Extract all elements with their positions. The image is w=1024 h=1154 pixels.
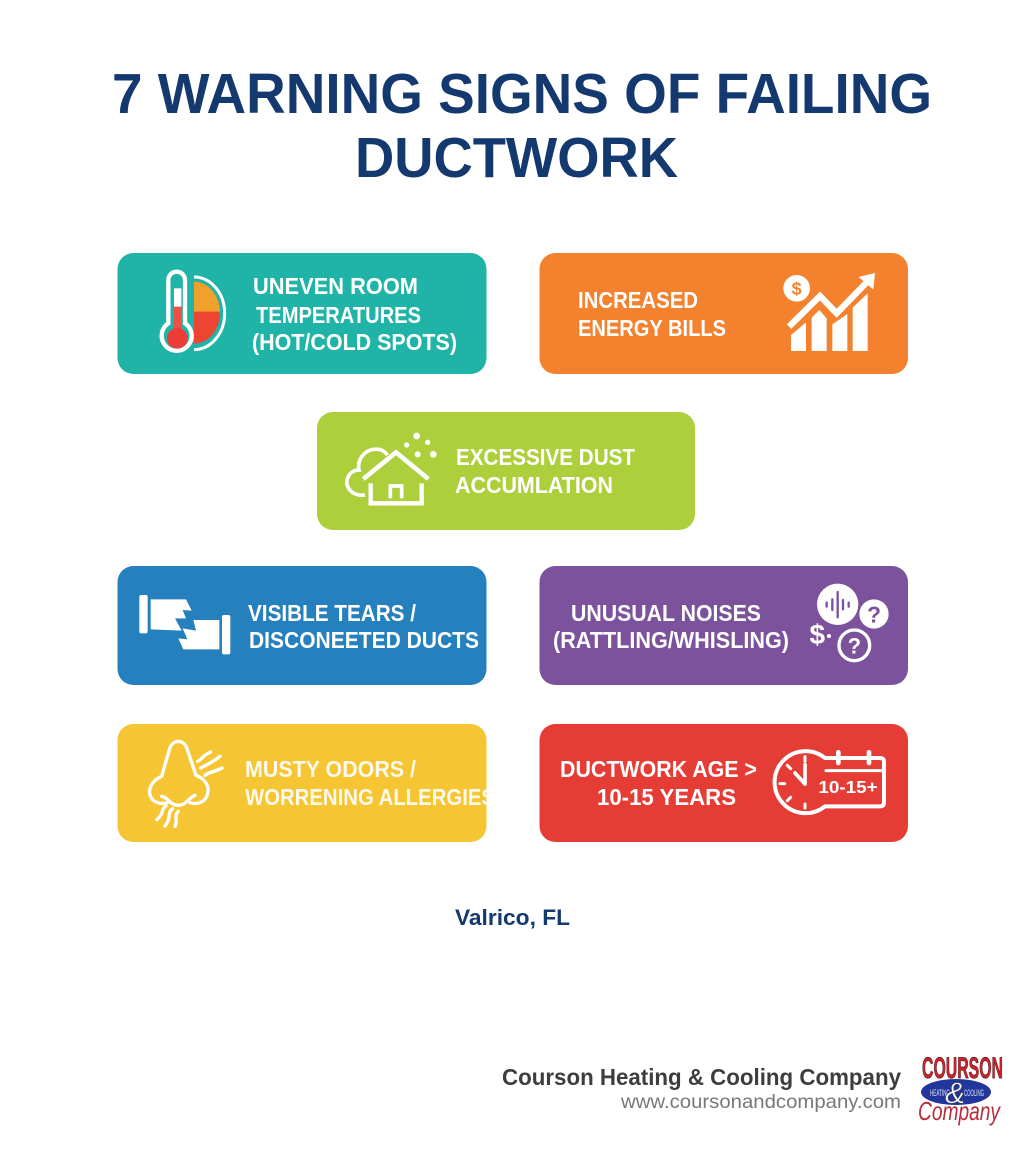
logo: Courson Heating & Cooling Company: COOLING xyxy=(964,1088,984,1098)
panel background: teal xyxy=(118,253,486,374)
text: excessive dust accumulation: ACCUMLATION xyxy=(455,472,613,498)
icon: clock and calendar xyxy=(775,751,884,813)
location label: Valrico, FL xyxy=(455,905,570,930)
logo: Courson Heating & Cooling Company xyxy=(918,1052,1003,1126)
text: ductwork age: DUCTWORK AGE > xyxy=(560,756,757,782)
panel: uneven room temperatures xyxy=(118,253,486,374)
text: unusual noises: (RATTLING/WHISLING) xyxy=(553,627,789,653)
text: musty odors / worrening allergies: WORRENING ALLERGIES xyxy=(245,784,495,810)
icon: sound wave bubbles and question marks: $ xyxy=(810,619,826,650)
title: 7 WARNING SIGNS OF FAILING xyxy=(112,62,932,126)
panel background: green xyxy=(317,412,695,530)
icon: sound wave bubbles and question marks: ? xyxy=(867,601,881,627)
panel: excessive dust accumulation xyxy=(317,412,695,530)
text: unusual noises: UNUSUAL NOISES xyxy=(571,600,761,626)
text: increased energy bills: ENERGY BILLS xyxy=(578,315,726,341)
text: uneven room temperatures: TEMPERATURES xyxy=(256,302,421,328)
icon: sound wave bubbles and question marks xyxy=(810,584,889,661)
icon: nose with odor waves xyxy=(150,741,222,826)
panel background: yellow xyxy=(118,724,486,842)
panel: musty odors / worsening allergies xyxy=(118,724,495,842)
footer company name: Courson Heating & Cooling Company xyxy=(502,1064,901,1090)
icon: clock and calendar: 10-15+ xyxy=(818,777,878,797)
text: excessive dust accumulation: EXCESSIVE DUST xyxy=(456,444,635,470)
panel: increased energy bills xyxy=(540,253,908,374)
title: DUCTWORK xyxy=(355,126,678,190)
footer website: www.coursonandcompany.com xyxy=(620,1091,901,1113)
text: increased energy bills xyxy=(578,287,726,341)
logo: Courson Heating & Cooling Company: HEATING xyxy=(930,1088,950,1098)
icon: sound wave bubbles and question marks: ? xyxy=(848,633,861,658)
icon: rising bar chart with dollar coin xyxy=(783,273,875,351)
icon: rising bar chart with dollar coin: $ xyxy=(792,279,802,299)
text: musty odors / worrening allergies xyxy=(245,760,486,805)
text: visible tears / disconeeted ducts xyxy=(248,600,479,653)
panel: unusual noises xyxy=(540,566,908,685)
panel: ductwork age xyxy=(540,724,908,842)
text: visible tears / disconeeted ducts: VISIBLE TEARS / xyxy=(248,600,417,626)
icon: house with dust cloud xyxy=(347,433,437,503)
panel: visible tears / disconnected ducts xyxy=(118,566,486,685)
panel background: orange xyxy=(540,253,908,374)
title xyxy=(112,62,932,190)
text: visible tears / disconeeted ducts: DISCONEETED DUCTS xyxy=(249,627,479,653)
logo: Courson Heating & Cooling Company: & xyxy=(945,1077,965,1110)
text: unusual noises xyxy=(553,600,789,653)
panel background: red xyxy=(540,724,908,842)
panel background: blue xyxy=(118,566,486,685)
text: increased energy bills: INCREASED xyxy=(578,287,698,313)
text: musty odors / worrening allergies: MUSTY ODORS / xyxy=(245,756,417,782)
text: uneven room temperatures: (HOT/COLD SPOTS) xyxy=(252,329,457,355)
icon: thermometer and half-circle gauge xyxy=(162,272,225,351)
panel background: purple xyxy=(540,566,908,685)
text: uneven room temperatures: UNEVEN ROOM xyxy=(253,273,418,299)
text: excessive dust accumulation xyxy=(455,444,635,498)
text: ductwork age xyxy=(560,756,757,810)
icon: torn duct xyxy=(139,595,230,654)
text: uneven room temperatures xyxy=(252,273,457,355)
text: ductwork age: 10-15 YEARS xyxy=(597,784,736,810)
